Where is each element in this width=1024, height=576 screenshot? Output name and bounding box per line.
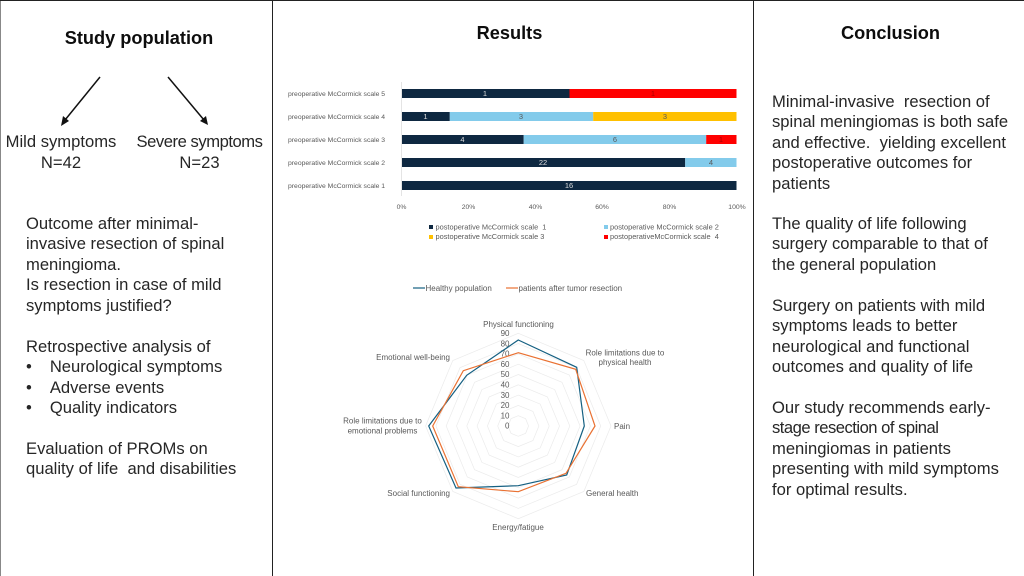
row: scale 4: 3: [663, 112, 667, 121]
text: recommendation: meningiomas in patients: [772, 439, 951, 458]
text: mild symptoms: [6, 132, 116, 172]
row: scale 1: 16: [565, 181, 573, 190]
text: mild symptoms: N=42: [41, 153, 81, 172]
chart legend: postoperative McCormick scale 2: [610, 222, 719, 232]
bar chart: McCormick scale: [288, 82, 746, 241]
text: outcome question: symptoms justified?: [26, 296, 172, 315]
x axis labels: 100%: [728, 204, 746, 211]
row: scale 5: preoperative McCormick scale 5: [288, 91, 385, 98]
radar axis labels: Energy/fatigue: [492, 523, 544, 532]
text: safety and effectiveness: patients: [772, 174, 830, 193]
row: scale 3: [288, 135, 736, 144]
radar axis labels: Pain: [614, 422, 630, 431]
radar scale labels: 20: [501, 401, 510, 410]
text: quality of life: the general population: [772, 255, 936, 274]
series: healthy population: [429, 340, 584, 488]
radar scale labels: 50: [501, 370, 510, 379]
x axis labels: 40%: [529, 204, 542, 211]
radar legend: Healthy population: [426, 284, 492, 293]
text: outcome question: [26, 214, 224, 315]
radar axis labels: Role limitations due to: [586, 348, 665, 358]
text: safety and effectiveness: postoperative outcomes for: [772, 153, 972, 172]
text: PROMs evaluation: quality of life and disabilities: [26, 459, 236, 478]
text: retrospective analysis: • Quality indicators: [26, 398, 177, 417]
row: scale 2: [288, 158, 736, 167]
text: severe symptoms: N=23: [179, 153, 220, 172]
radar scale labels: 0: [505, 422, 510, 431]
radar scale labels: 70: [501, 350, 510, 359]
text: safety and effectiveness: and effective. yielding excellent: [772, 133, 1006, 152]
heading: results: Results: [477, 23, 542, 43]
text: PROMs evaluation: [26, 439, 236, 478]
text: recommendation: Our study recommends early-: [772, 398, 991, 417]
row: scale 3: 1: [719, 135, 723, 144]
text: severe symptoms: [136, 132, 263, 172]
row: scale 1: [288, 181, 736, 190]
radar axis labels: Emotional well-being: [376, 353, 450, 362]
row: scale 4: preoperative McCormick scale 4: [288, 114, 385, 121]
radar axis labels: emotional problems: [348, 426, 417, 436]
row: scale 4: 1: [423, 112, 428, 121]
row: scale 3: 4: [460, 135, 465, 144]
radar axis labels: Role limitations due to: [343, 416, 422, 426]
text: mild symptom surgery: symptoms leads to better: [772, 316, 957, 335]
chart legend: postoperativeMcCormick scale 4: [610, 232, 719, 241]
series: patients after tumor resection: [433, 353, 595, 492]
text: outcome question: invasive resection of spinal: [26, 234, 224, 253]
text: quality of life: surgery comparable to that of: [772, 234, 988, 253]
x axis labels: 60%: [595, 204, 609, 211]
row: scale 2: preoperative McCormick scale 2: [288, 160, 385, 167]
text: mild symptom surgery: Surgery on patients with mild: [772, 296, 985, 315]
radar scale labels: 90: [501, 329, 510, 338]
text: safety and effectiveness: spinal meningiomas is both safe: [772, 112, 1008, 131]
text: mild symptoms: Mild symptoms: [6, 132, 116, 151]
text: safety and effectiveness: [772, 92, 1008, 193]
row: scale 2: 4: [709, 158, 713, 167]
row: scale 3: preoperative McCormick scale 3: [288, 137, 385, 144]
text: PROMs evaluation: Evaluation of PROMs on: [26, 439, 208, 458]
heading: conclusion: Conclusion: [841, 23, 940, 43]
radar axis labels: physical health: [599, 358, 651, 367]
icon: arrows to symptom groups: [61, 76, 208, 126]
x axis labels: [397, 204, 746, 211]
text: mild symptom surgery: neurological and functional: [772, 337, 969, 356]
radar scale labels: 80: [501, 339, 510, 348]
radar axis labels: Social functioning: [387, 489, 450, 498]
text: recommendation: stage resection of spinal: [772, 418, 938, 437]
text: outcome question: meningioma.: [26, 255, 121, 274]
x axis labels: 80%: [663, 204, 676, 211]
chart legend: postoperative McCormick scale 3: [436, 232, 544, 241]
text: safety and effectiveness: Minimal-invasive resection of: [772, 92, 990, 111]
chart legend: postoperative McCormick scale 1: [436, 222, 546, 232]
heading: study population: Study population: [65, 28, 213, 48]
text: recommendation: [772, 398, 999, 499]
radar scale labels: 30: [501, 391, 510, 400]
text: severe symptoms: Severe symptoms: [136, 132, 263, 151]
row: scale 5: 1: [483, 89, 487, 98]
radar scale labels: 40: [501, 380, 510, 390]
panel: study population: [6, 28, 263, 478]
radar legend: patients after tumor resection: [518, 284, 622, 293]
text: retrospective analysis: • Neurological symptoms: [26, 357, 222, 376]
radar legend: [413, 284, 622, 293]
text: retrospective analysis: [26, 337, 222, 417]
row: scale 3: 6: [613, 135, 617, 144]
text: mild symptom surgery: [772, 296, 985, 376]
x axis labels: 20%: [462, 204, 475, 211]
radar scale labels: 60: [501, 360, 510, 369]
row: scale 4: [288, 112, 736, 121]
text: mild symptom surgery: outcomes and quality of life: [772, 357, 973, 376]
radar axis labels: [343, 320, 665, 532]
radar grid: [426, 333, 611, 519]
text: retrospective analysis: • Adverse events: [26, 378, 164, 397]
text: recommendation: presenting with mild symptoms: [772, 459, 999, 478]
row: scale 4: 3: [519, 112, 523, 121]
text: quality of life: [772, 214, 988, 274]
row: scale 2: 22: [539, 158, 547, 167]
panel: conclusion: [772, 23, 1008, 499]
text: outcome question: Is resection in case of mild: [26, 275, 222, 294]
radar scale labels: 10: [501, 411, 510, 420]
text: recommendation: for optimal results.: [772, 480, 908, 499]
radar scale labels: [501, 329, 510, 431]
text: quality of life: The quality of life following: [772, 214, 967, 233]
text: outcome question: Outcome after minimal-: [26, 214, 198, 233]
radar axis labels: Physical functioning: [483, 320, 554, 329]
row: scale 1: preoperative McCormick scale 1: [288, 183, 385, 190]
row: scale 5: [288, 89, 736, 98]
text: retrospective analysis: Retrospective analysis of: [26, 337, 210, 356]
chart legend: [429, 222, 719, 241]
row: scale 5: 1: [651, 89, 655, 98]
x axis labels: 0%: [397, 204, 406, 211]
radar axis labels: General health: [586, 489, 638, 498]
